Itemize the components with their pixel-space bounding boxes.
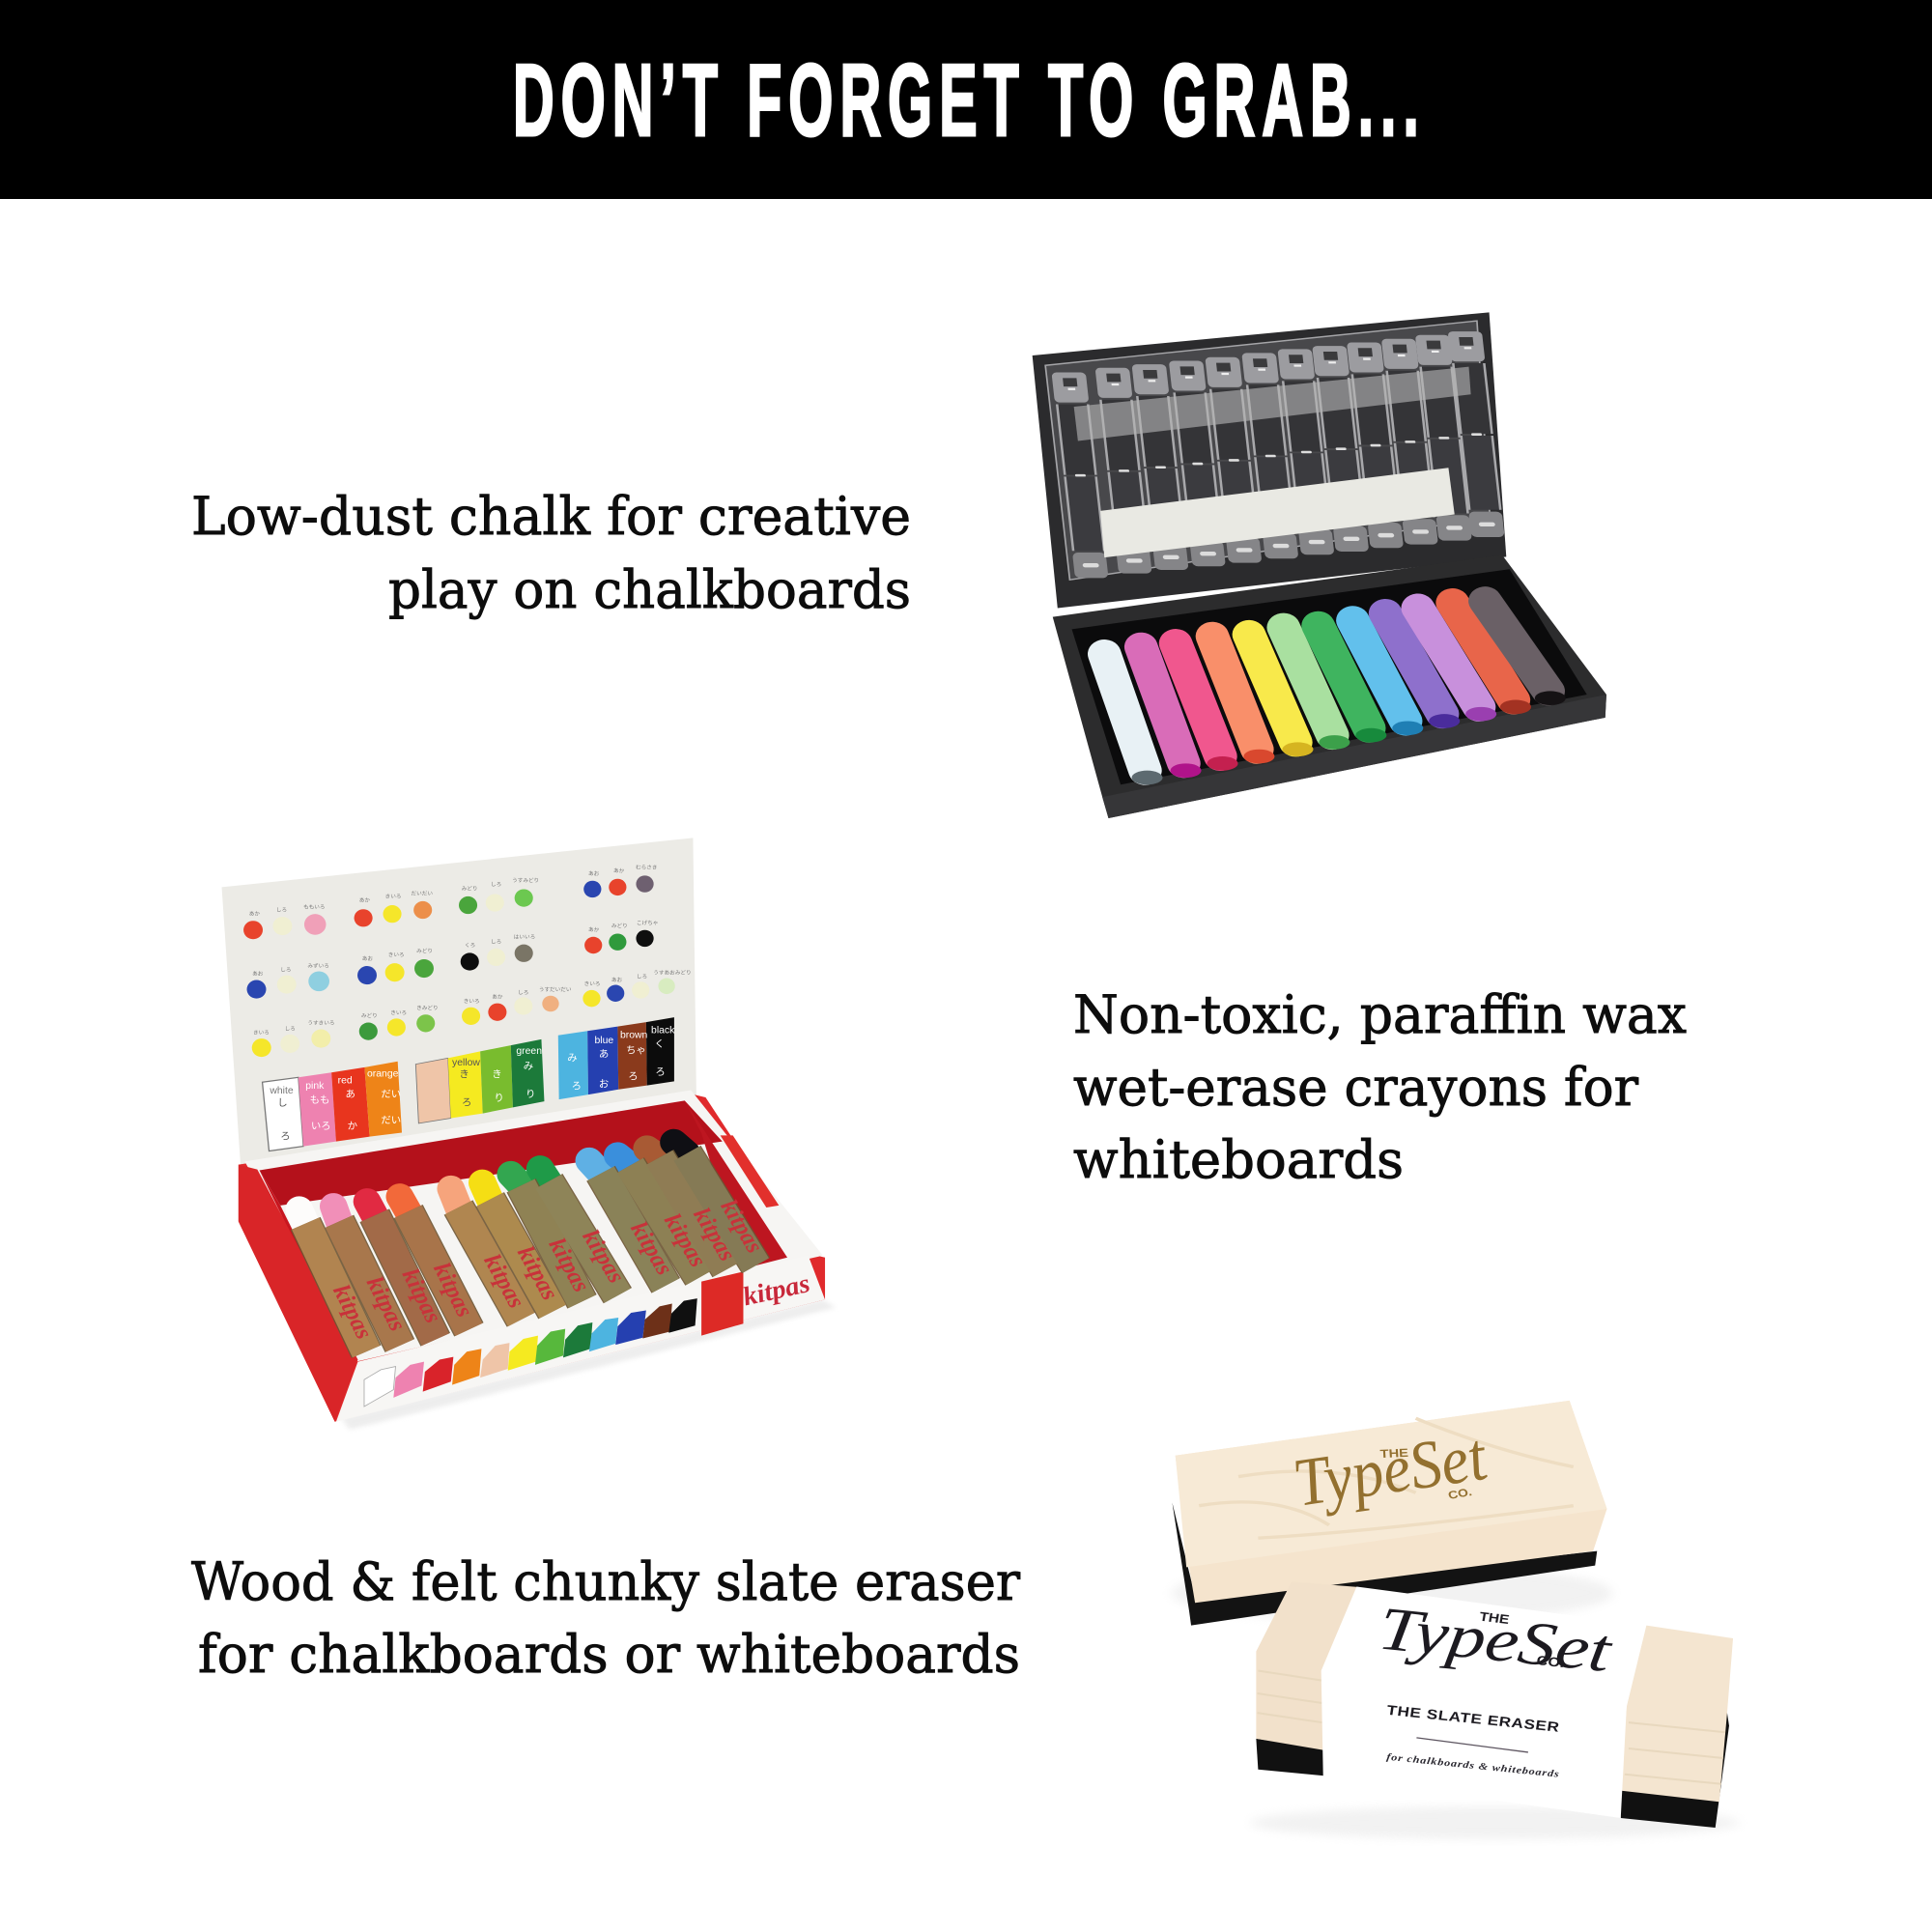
- colour mixing chart: しろ: [276, 906, 287, 913]
- title: DON’T FORGET TO GRAB...: [513, 43, 1419, 157]
- colour swatches group 1: か: [348, 1121, 357, 1132]
- colour mixing chart: うすきいろ: [307, 1020, 335, 1027]
- colour mixing chart: [243, 865, 692, 1057]
- sleeve logo: TypeSet: [1375, 1595, 1617, 1686]
- colour mixing chart: きいろ: [584, 980, 601, 987]
- colour swatches group 3: ろ: [572, 1082, 582, 1093]
- colour mixing chart: みどり: [361, 1011, 378, 1019]
- kitpas crayon labels: kitpas: [659, 1209, 711, 1271]
- colour swatches group 1: pink: [305, 1081, 325, 1092]
- crayon box tray: [239, 1091, 825, 1422]
- chalk stick ends: [1132, 691, 1566, 784]
- colour mixing chart: うすだいだい: [539, 986, 572, 993]
- colour swatches group 2: み: [524, 1062, 533, 1072]
- colour swatches group 1: orange: [367, 1069, 399, 1079]
- photo: crayon box: [222, 838, 836, 1430]
- colour mixing chart: きみどり: [416, 1004, 439, 1011]
- colour swatches group 1: あ: [345, 1089, 355, 1100]
- box front crayon colour shapes: [364, 1298, 697, 1406]
- colour mixing chart: こげちゃ: [637, 919, 658, 926]
- colour swatches group 3: black: [651, 1026, 675, 1037]
- colour swatches group 2: green: [516, 1046, 542, 1057]
- colour mixing chart: はいいろ: [514, 934, 535, 940]
- photo: chalk box: [1033, 312, 1606, 818]
- colour mixing chart: うすあおみどり: [653, 968, 692, 976]
- colour mixing chart: しろ: [491, 881, 501, 888]
- colour swatches group 1: もも: [310, 1094, 329, 1106]
- branding burned on rear eraser: THE: [1379, 1446, 1408, 1461]
- crayon box lid: [222, 838, 696, 1165]
- colour mixing chart: みどり: [462, 884, 477, 892]
- colour mixing chart: ももいろ: [303, 903, 325, 910]
- colour swatches group 2: き: [459, 1068, 469, 1080]
- colour mixing chart: あか: [359, 897, 371, 904]
- text block: chalk description: play on chalkboards: [388, 559, 911, 620]
- colour swatches group 1: だい: [381, 1089, 401, 1100]
- crayon tips: [299, 1142, 687, 1224]
- colour mixing chart: あか: [249, 911, 260, 917]
- colour swatches group 3: く: [655, 1039, 665, 1050]
- colour swatches group 1: red: [338, 1076, 353, 1086]
- chalk box lid: [1033, 312, 1506, 608]
- header band: [0, 0, 1932, 199]
- colour mixing chart: しろ: [285, 1025, 296, 1032]
- kitpas crayon labels: kitpas: [478, 1250, 529, 1313]
- sleeve rule: [1416, 1738, 1528, 1752]
- sleeve caption: for chalkboards & whiteboards: [1386, 1752, 1560, 1779]
- box shadow: [341, 1299, 836, 1430]
- colour mixing chart: むらさき: [636, 865, 658, 871]
- branding burned on rear eraser: TypeSet: [1287, 1418, 1494, 1520]
- colour swatches group 3: ちゃ: [626, 1045, 646, 1056]
- chalk sticks: [1104, 601, 1548, 771]
- sleeve title: THE SLATE ERASER: [1385, 1703, 1560, 1735]
- sleeve logo: CO.: [1535, 1653, 1566, 1671]
- colour mixing chart: きいろ: [385, 894, 402, 900]
- colour swatches group 3: ろ: [628, 1072, 639, 1082]
- colour swatches group 3: ろ: [655, 1067, 666, 1078]
- rear wooden eraser: [1172, 1401, 1606, 1626]
- colour mixing chart: あお: [362, 955, 374, 962]
- colour swatches group 1: ろ: [280, 1132, 291, 1142]
- kitpas box logo: kitpas: [740, 1269, 813, 1312]
- text block: chalk description: [191, 486, 911, 620]
- colour mixing chart: きいろ: [388, 952, 405, 958]
- kitpas crayon labels: kitpas: [327, 1281, 378, 1343]
- kitpas crayon labels: kitpas: [396, 1264, 446, 1327]
- colour mixing chart: だいだい: [412, 890, 434, 896]
- kitpas crayon labels: kitpas: [361, 1273, 411, 1335]
- photo: erasers: [1172, 1401, 1739, 1839]
- kitpas crayon labels: kitpas: [428, 1259, 478, 1321]
- crayons: [305, 1153, 755, 1351]
- kitpas crayon labels: kitpas: [512, 1242, 563, 1304]
- colour mixing chart: きいろ: [253, 1030, 270, 1036]
- text block: crayon description: [1073, 984, 1687, 1190]
- colour swatches group 2: り: [494, 1093, 504, 1104]
- colour mixing chart: あお: [611, 977, 623, 983]
- colour swatches group 1: いろ: [311, 1122, 331, 1132]
- text block: eraser description: [191, 1551, 1020, 1685]
- colour swatches group 2: yellow: [452, 1058, 481, 1068]
- front eraser wood: [1256, 1581, 1733, 1802]
- colour swatches group 3: blue: [595, 1036, 614, 1046]
- colour mixing chart: あお: [252, 971, 264, 978]
- colour swatches group 2: き: [492, 1068, 502, 1080]
- colour swatches group 1: し: [277, 1097, 288, 1109]
- colour mixing chart: しろ: [518, 989, 528, 996]
- colour swatches group 3: お: [599, 1079, 609, 1091]
- kitpas crayon labels: kitpas: [688, 1204, 741, 1265]
- colour mixing chart: しろ: [280, 967, 291, 973]
- colour mixing chart: あか: [492, 994, 503, 1001]
- colour swatches group 3: brown: [620, 1031, 647, 1041]
- kitpas crayon labels: [327, 1196, 768, 1343]
- colour swatches group 1: だい: [381, 1115, 401, 1126]
- text block: chalk description: Low-dust chalk for creative: [191, 486, 911, 547]
- colour swatches group 1: [263, 1062, 402, 1151]
- colour swatches group 2: [415, 1039, 544, 1123]
- text block: crayon description: wet-erase crayons for: [1073, 1057, 1638, 1118]
- kitpas crayon labels: kitpas: [715, 1196, 768, 1258]
- colour swatches group 3: [558, 1017, 675, 1099]
- colour mixing chart: しろ: [491, 939, 501, 945]
- front eraser felt: [1256, 1713, 1729, 1828]
- colour mixing chart: くろ: [465, 942, 475, 949]
- text block: crayon description: Non-toxic, paraffin wax: [1073, 984, 1687, 1045]
- kitpas crayon labels: kitpas: [625, 1217, 678, 1280]
- colour mixing chart: あか: [588, 926, 600, 933]
- chalk box tray: [1053, 555, 1606, 818]
- branding burned on rear eraser: CO.: [1447, 1486, 1473, 1502]
- colour mixing chart: きいろ: [464, 998, 480, 1005]
- colour mixing chart: きいろ: [390, 1009, 407, 1016]
- text block: eraser description: for chalkboards or whiteboards: [198, 1624, 1020, 1685]
- colour mixing chart: あお: [588, 870, 600, 877]
- colour mixing chart: みどり: [416, 947, 433, 954]
- colour swatches group 3: み: [567, 1054, 578, 1065]
- colour mixing chart: うすみどり: [512, 876, 539, 884]
- text block: eraser description: Wood & felt chunky slate eraser: [191, 1551, 1020, 1612]
- colour mixing chart: しろ: [637, 974, 647, 980]
- colour swatches group 2: り: [526, 1089, 535, 1100]
- kitpas crayon labels: kitpas: [577, 1226, 630, 1288]
- colour mixing chart: みずいろ: [307, 961, 329, 969]
- colour mixing chart: あか: [613, 867, 625, 874]
- text block: crayon description: whiteboards: [1073, 1129, 1404, 1190]
- colour swatches group 1: white: [269, 1086, 294, 1096]
- sleeve logo: THE: [1478, 1610, 1510, 1628]
- colour swatches group 2: ろ: [462, 1097, 471, 1108]
- colour swatches group 3: あ: [599, 1049, 609, 1060]
- kitpas crayon labels: kitpas: [543, 1235, 595, 1296]
- colour mixing chart: みどり: [611, 922, 628, 929]
- table shadow: [1172, 1564, 1739, 1839]
- paper sleeve: [1321, 1586, 1646, 1818]
